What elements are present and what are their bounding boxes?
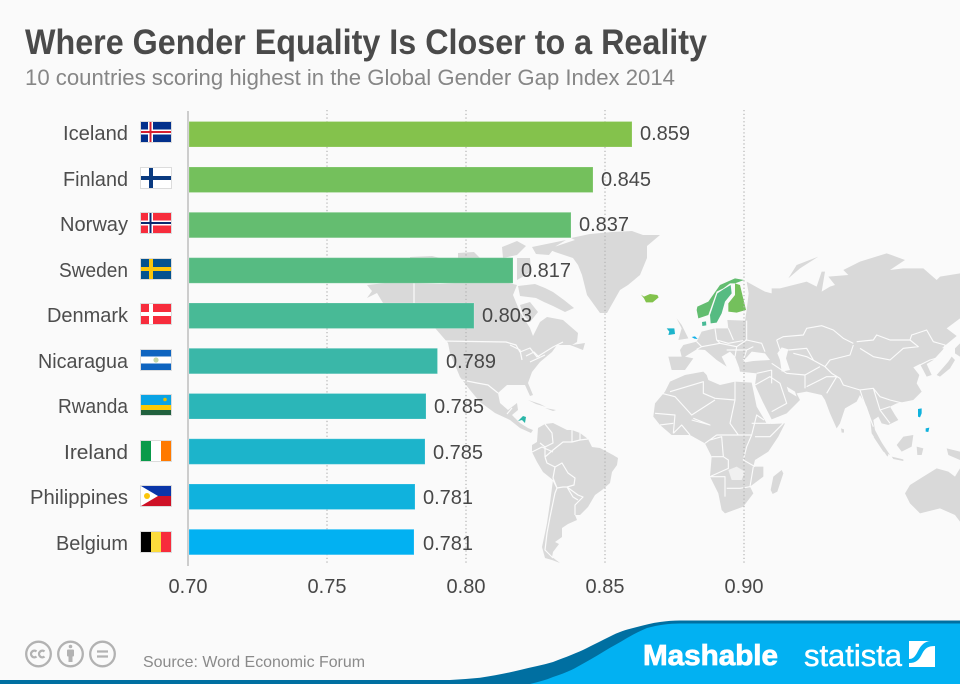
map: Africa bbox=[653, 372, 785, 513]
flags bbox=[140, 121, 172, 553]
bars bbox=[189, 122, 632, 555]
map: Philippines bbox=[918, 408, 929, 432]
icon: by bbox=[58, 642, 83, 666]
x axis labels: 0.80 bbox=[447, 576, 485, 598]
flag: Nicaragua bbox=[140, 349, 172, 371]
country labels: Ireland bbox=[64, 442, 128, 464]
source: Source: Word Economic Forum bbox=[143, 654, 365, 671]
country labels bbox=[30, 123, 129, 555]
icon: nd bbox=[90, 642, 115, 666]
flag: Finland bbox=[140, 167, 172, 189]
value labels bbox=[423, 123, 690, 555]
y axis line bbox=[187, 111, 189, 566]
logo: statista: statista bbox=[804, 638, 903, 673]
flag: Norway bbox=[140, 212, 172, 234]
map: Iceland bbox=[641, 294, 659, 302]
map: Greenland bbox=[548, 231, 660, 313]
icon: cc bbox=[26, 642, 51, 666]
light blue band bbox=[530, 624, 960, 684]
creative commons icons bbox=[26, 642, 115, 666]
flag: Philippines bbox=[140, 485, 172, 507]
world map bbox=[367, 231, 960, 563]
flag: Denmark bbox=[140, 303, 172, 325]
map: Belgium bbox=[692, 336, 698, 339]
value labels: 0.785 bbox=[434, 396, 484, 418]
x axis labels: 0.90 bbox=[725, 576, 763, 598]
value labels: 0.859 bbox=[640, 123, 690, 145]
map: Eastern hemisphere bbox=[641, 253, 960, 522]
map: North and Central America bbox=[367, 280, 585, 433]
country labels: Norway bbox=[60, 214, 128, 236]
value labels: 0.837 bbox=[579, 214, 629, 236]
value labels: 0.781 bbox=[423, 487, 473, 509]
country labels: Sweden bbox=[59, 260, 128, 282]
value labels: 0.781 bbox=[423, 533, 473, 555]
map: Zimbabwe-area blank bbox=[728, 467, 745, 480]
country labels: Rwanda bbox=[58, 396, 129, 418]
logo: Mashable: Mashable bbox=[643, 640, 778, 672]
x axis labels bbox=[169, 576, 763, 598]
country labels: Philippines bbox=[30, 487, 128, 509]
value labels: 0.803 bbox=[482, 305, 532, 327]
map: South America borders bbox=[532, 424, 588, 558]
dark wave bbox=[0, 620, 960, 684]
x axis labels: 0.85 bbox=[586, 576, 624, 598]
map: Canadian Arctic islands bbox=[410, 240, 574, 322]
map: Denmark bbox=[702, 321, 706, 326]
map: Finland bbox=[728, 283, 746, 313]
map: Australia bbox=[905, 468, 960, 522]
map: inland seas bbox=[777, 347, 797, 397]
bar chart bbox=[30, 111, 763, 598]
logo: statista mark bbox=[909, 641, 935, 667]
flag: Sweden bbox=[140, 258, 172, 280]
x axis labels: 0.70 bbox=[169, 576, 207, 598]
country labels: Belgium bbox=[56, 533, 128, 555]
map: Caribbean islands bbox=[528, 400, 565, 411]
flag: Iceland bbox=[140, 121, 172, 143]
value labels: 0.785 bbox=[433, 442, 483, 464]
country labels: Finland bbox=[63, 169, 128, 191]
flag: Belgium bbox=[140, 531, 172, 553]
map: Nicaragua bbox=[518, 416, 526, 423]
map: Great Lakes bbox=[510, 345, 545, 362]
map: Eurasia bbox=[668, 253, 960, 457]
value labels: 0.845 bbox=[601, 169, 651, 191]
country labels: Denmark bbox=[47, 305, 129, 327]
title: Where Gender Equality Is Closer to a Reality bbox=[25, 23, 707, 62]
x axis labels: 0.75 bbox=[308, 576, 346, 598]
map: Asian and Pacific islands bbox=[677, 257, 960, 494]
flag: Ireland bbox=[140, 440, 172, 462]
gridlines bbox=[327, 110, 744, 565]
value labels: 0.817 bbox=[521, 260, 571, 282]
value labels: 0.789 bbox=[446, 351, 496, 373]
map: Norway bbox=[697, 278, 744, 318]
map: South America bbox=[532, 423, 618, 563]
map: Ireland bbox=[667, 328, 675, 335]
map: Sweden bbox=[710, 285, 732, 323]
footer wave bbox=[0, 620, 960, 684]
map: North America borders bbox=[414, 283, 563, 417]
country labels: Nicaragua bbox=[38, 351, 129, 373]
map: country borders bbox=[655, 321, 945, 497]
country labels: Iceland bbox=[63, 123, 128, 145]
flag: Rwanda bbox=[140, 394, 172, 416]
subtitle: 10 countries scoring highest in the Global Gender Gap Index 2014 bbox=[25, 65, 675, 90]
